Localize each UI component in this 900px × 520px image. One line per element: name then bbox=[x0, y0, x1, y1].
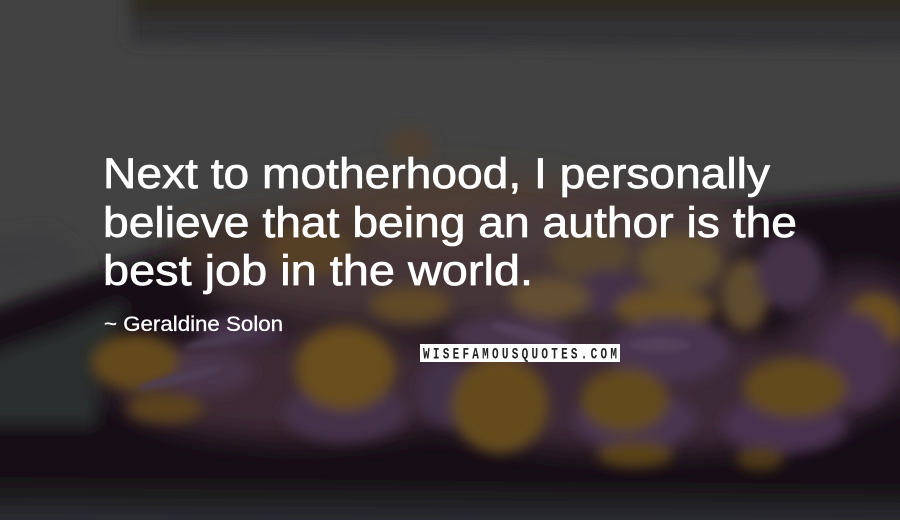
quote text: best job in the world. bbox=[103, 247, 533, 295]
watermark: WISEFAMOUSQUOTES.COM bbox=[423, 347, 617, 364]
quote text: Next to motherhood, I personally bbox=[103, 150, 771, 198]
quote text bbox=[103, 150, 797, 295]
attribution: ~ Geraldine Solon bbox=[104, 313, 283, 336]
quote text: believe that being an author is the bbox=[103, 199, 797, 247]
